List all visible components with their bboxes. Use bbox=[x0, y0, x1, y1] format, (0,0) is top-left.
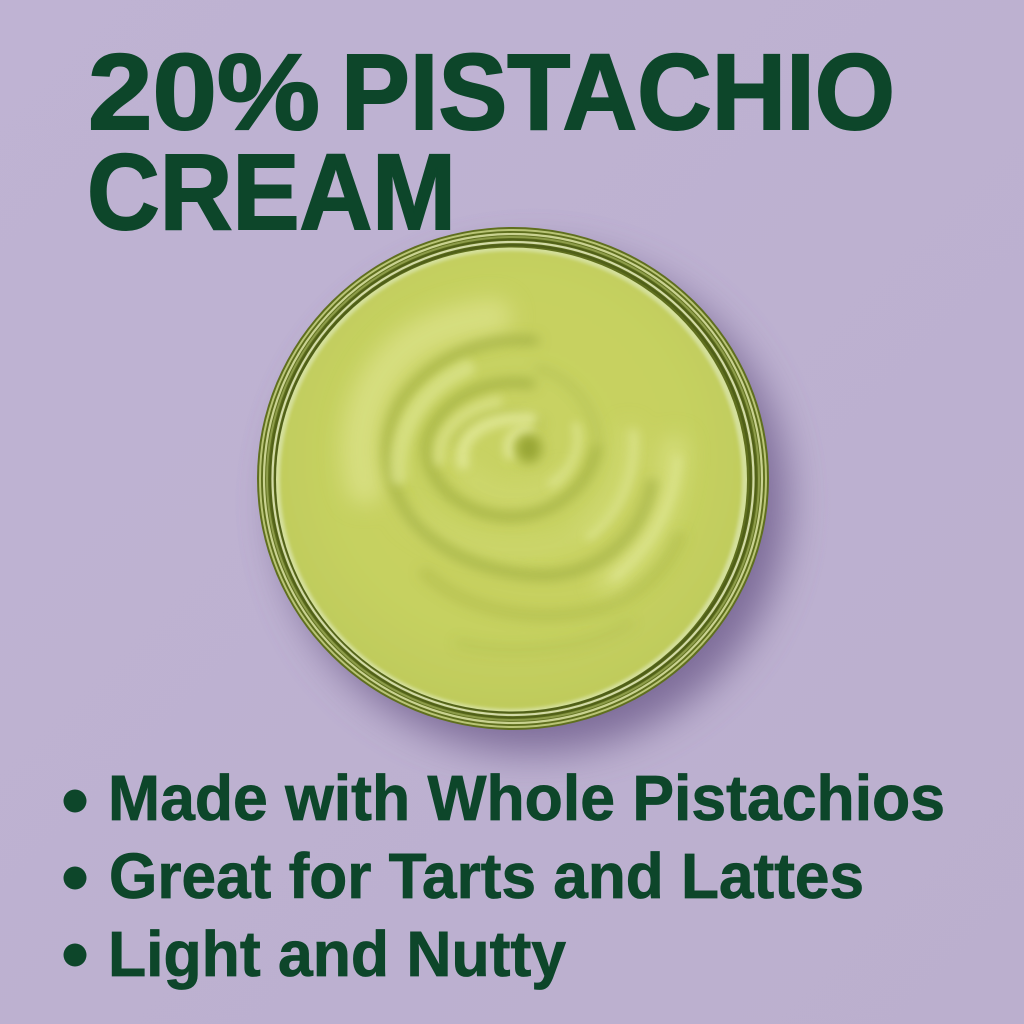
bullet list bbox=[64, 762, 945, 990]
bullet: tarts and lattes: Great for Tarts and Lattes bbox=[109, 840, 864, 912]
bullet: light and nutty: Light and Nutty bbox=[108, 918, 566, 990]
cream surface bbox=[280, 251, 742, 709]
title: 20% bbox=[88, 31, 320, 152]
swirl grooves bbox=[388, 340, 679, 650]
title: PISTACHIO bbox=[341, 31, 895, 152]
title: CREAM bbox=[87, 131, 456, 252]
jar of pistachio cream bbox=[257, 227, 787, 752]
jar shadow bbox=[279, 252, 787, 752]
jar rim bbox=[257, 227, 769, 730]
bullet: whole pistachios: Made with Whole Pistachios bbox=[108, 762, 945, 834]
title bbox=[87, 31, 895, 252]
swirl centre dimple bbox=[516, 434, 542, 463]
swirl highlights bbox=[398, 368, 678, 577]
cream lip bbox=[276, 248, 747, 712]
cream swirl bbox=[360, 317, 679, 650]
broad highlights bbox=[360, 317, 674, 582]
